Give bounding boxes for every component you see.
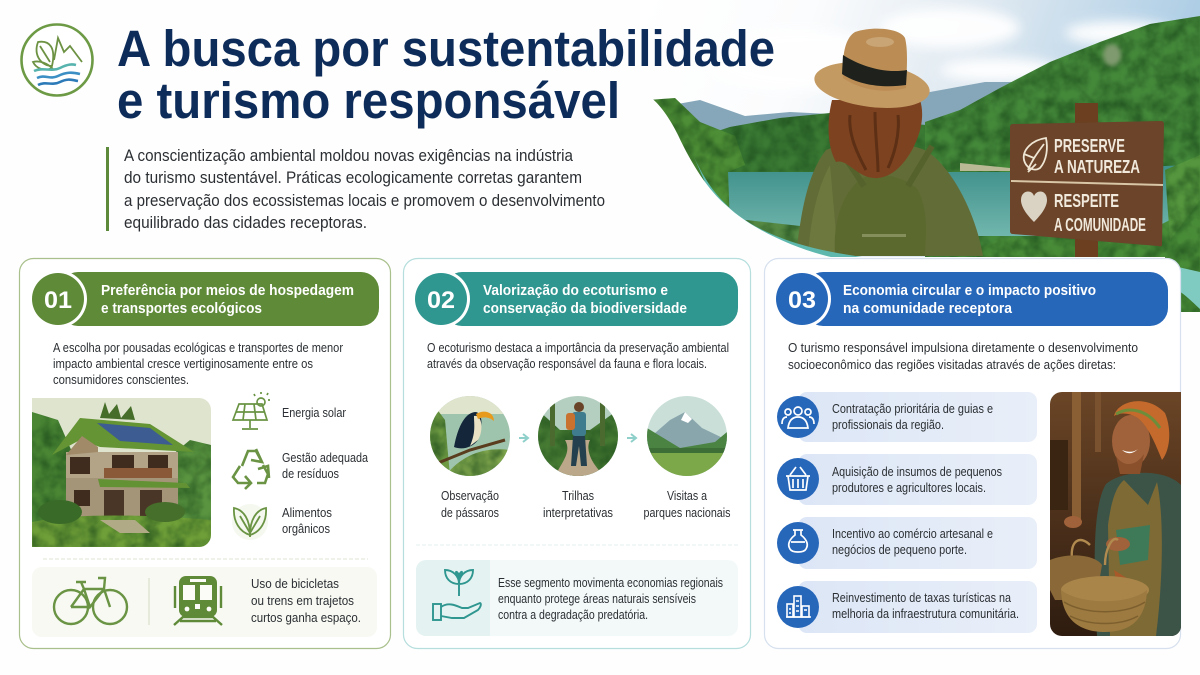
- panel 2 header: 02: [427, 287, 455, 314]
- transport text: Uso de bicicletas: [251, 577, 339, 591]
- icon: bicycle: [54, 578, 127, 624]
- teal wave accent: [690, 148, 862, 257]
- item: insumos: [777, 454, 1037, 505]
- photo: hiker on trail: [538, 396, 618, 476]
- circle captions: Visitas a: [667, 489, 707, 503]
- circle captions: Observação: [441, 489, 499, 503]
- callout text: contra a degradação predatória.: [498, 608, 648, 622]
- sign: [1010, 103, 1164, 263]
- eco house photo: [32, 398, 211, 547]
- panel 2 header: conservação da biodiversidade: [483, 301, 687, 317]
- panel 3 header: 03: [788, 287, 816, 314]
- sky: [808, 0, 1200, 257]
- clouds: [822, 6, 1169, 84]
- hands: [1064, 516, 1082, 528]
- panel 2 description: [427, 341, 729, 371]
- photo: artisan woman with baskets: [1050, 392, 1181, 636]
- logo leaf: [33, 42, 53, 70]
- hillside rock patch: [1103, 44, 1121, 66]
- sign board: [1010, 121, 1164, 246]
- icon: hand holding plant: [433, 570, 481, 620]
- label: alimentos organicos: [282, 506, 332, 536]
- panel 1 description: A escolha por pousadas ecológicas e transportes de menor: [53, 341, 343, 355]
- backpack: [834, 230, 838, 253]
- photo: toucan: [430, 396, 510, 476]
- icon: recycle: [233, 449, 269, 489]
- item: artesanato: [777, 517, 1037, 569]
- traveller: [796, 29, 983, 256]
- baskets: [1072, 539, 1118, 565]
- intro paragraph: A conscientização ambiental moldou novas exigências na indústria: [124, 146, 573, 165]
- icon: organic leaves: [232, 504, 268, 540]
- panel 3 header: [773, 270, 1168, 328]
- label: gestao de residuos: Gestão adequada: [282, 451, 368, 465]
- hat band: [842, 55, 907, 86]
- panel 2 description: através da observação responsável da fauna e flora locais.: [427, 357, 707, 371]
- icon: leaf on sign: [1024, 138, 1047, 172]
- ecoturismo callout: [416, 560, 738, 636]
- intro paragraph: a preservação dos ecossistemas locais e promovem o desenvolvimento: [124, 191, 605, 210]
- headscarf: [1114, 401, 1169, 460]
- hat: [814, 62, 930, 108]
- panel 2 description: O ecoturismo destaca a importância da preservação ambiental: [427, 341, 729, 355]
- foreground bushes: [745, 220, 800, 244]
- circle captions: [441, 489, 730, 520]
- right hillside: [925, 16, 1200, 257]
- white wave mask: [640, 92, 835, 258]
- transport text: [251, 577, 361, 625]
- icon: vase: [789, 530, 807, 552]
- lake: [700, 165, 1190, 236]
- panel 1 header: e transportes ecológicos: [101, 301, 262, 317]
- panel 3 description: socioeconômico das regiões visitadas através de ações diretas:: [788, 358, 1116, 372]
- panel 3: economia circular: [764, 258, 1181, 648]
- apron: [1108, 480, 1162, 636]
- intro accent bar: [106, 147, 109, 231]
- panel 1 header: Preferência por meios de hospedagem: [101, 283, 354, 299]
- panel 1 description: consumidores conscientes.: [53, 373, 189, 387]
- item: guias: [777, 392, 1037, 442]
- transport box: [32, 567, 377, 637]
- panel 1 header: 01: [44, 287, 72, 314]
- item: infraestrutura: [777, 581, 1037, 633]
- panel 2 header: [412, 270, 738, 328]
- callout text: enquanto protege áreas naturais sensíveis: [498, 592, 696, 606]
- intro paragraph: equilibrado das cidades receptoras.: [124, 213, 367, 232]
- logo waves: [34, 64, 80, 85]
- panel 3 header: na comunidade receptora: [843, 301, 1013, 317]
- left shore trees: [653, 98, 745, 208]
- panel 1 card: [20, 258, 390, 648]
- head: [1112, 415, 1150, 467]
- item: guias: Contratação prioritária de guias e: [832, 402, 993, 416]
- callout text: Esse segmento movimenta economias regionais: [498, 576, 723, 590]
- teal corner wave at right: [1160, 264, 1200, 309]
- item: artesanato: Incentivo ao comércio artesanal e: [832, 527, 993, 541]
- title: A busca por sustentabilidade: [117, 20, 775, 77]
- panel 1 header: [29, 270, 379, 328]
- circle captions: Trilhas: [562, 489, 594, 503]
- item: infraestrutura: melhoria da infraestrutura comunitária.: [832, 607, 1019, 621]
- item: insumos: produtores e agricultores locais.: [832, 481, 986, 495]
- sign text: PRESERVE: [1054, 136, 1125, 156]
- circle captions: de pássaros: [441, 506, 499, 520]
- torso: [1095, 473, 1181, 636]
- hero photo: traveller overlooking lake: [640, 0, 1200, 320]
- intro paragraph: [124, 146, 605, 232]
- sign post: [1075, 103, 1098, 263]
- intro paragraph: do turismo sustentável. Práticas ecologicamente corretas garantem: [124, 168, 582, 187]
- icon: buildings: [786, 596, 811, 617]
- circle captions: interpretativas: [543, 506, 613, 520]
- label: gestao de residuos: [282, 451, 368, 481]
- icon: solar panel: [233, 392, 270, 429]
- circle captions: parques nacionais: [644, 506, 730, 520]
- panel 2: ecoturismo: [404, 258, 750, 648]
- panel 3 description: O turismo responsável impulsiona diretamente o desenvolvimento: [788, 341, 1138, 355]
- logo mountains: [54, 38, 82, 62]
- panel 3 header: Economia circular e o impacto positivo: [843, 283, 1096, 299]
- sign text: A COMUNIDADE: [1054, 215, 1146, 235]
- transport text: curtos ganha espaço.: [251, 611, 361, 625]
- arrow: [519, 434, 528, 442]
- far shore: [960, 163, 1010, 171]
- photo: national park mountain: [647, 396, 727, 476]
- panel 3 description: [788, 341, 1138, 372]
- sign text: [1054, 136, 1146, 235]
- title: e turismo responsável: [117, 72, 620, 129]
- panel 1 description: impacto ambiental cresce vertiginosamente entre os: [53, 357, 313, 371]
- label: gestao de residuos: de resíduos: [282, 467, 339, 481]
- panel 1: hospedagem e transportes: [20, 258, 390, 648]
- panel 2 card: [404, 258, 750, 648]
- panel 3 card: [764, 258, 1180, 648]
- panel 2 header: Valorização do ecoturismo e: [483, 283, 668, 299]
- distant mountains: [680, 82, 1012, 130]
- icon: people: [782, 407, 814, 428]
- panel 1 description: [53, 341, 343, 387]
- item: infraestrutura: Reinvestimento de taxas turísticas na: [832, 591, 1011, 605]
- arrow: [627, 434, 636, 442]
- title: [117, 20, 775, 129]
- icon: heart on sign: [1021, 191, 1047, 222]
- label: alimentos organicos: orgânicos: [282, 522, 330, 536]
- icon: train: [174, 576, 222, 625]
- label: energia solar: Energia solar: [282, 406, 346, 420]
- sign text: RESPEITE: [1054, 191, 1119, 211]
- left forest: [720, 113, 925, 172]
- callout text: [498, 576, 723, 622]
- sign text: A NATUREZA: [1054, 157, 1140, 177]
- item: guias: profissionais da região.: [832, 418, 944, 432]
- label: alimentos organicos: Alimentos: [282, 506, 332, 520]
- item: artesanato: negócios de pequeno porte.: [832, 543, 967, 557]
- item: insumos: Aquisição de insumos de pequenos: [832, 465, 1002, 479]
- transport text: ou trens em trajetos: [251, 594, 354, 608]
- logo: [22, 24, 92, 96]
- jacket: [796, 142, 983, 256]
- icon: basket: [786, 467, 810, 490]
- hair: [829, 100, 922, 178]
